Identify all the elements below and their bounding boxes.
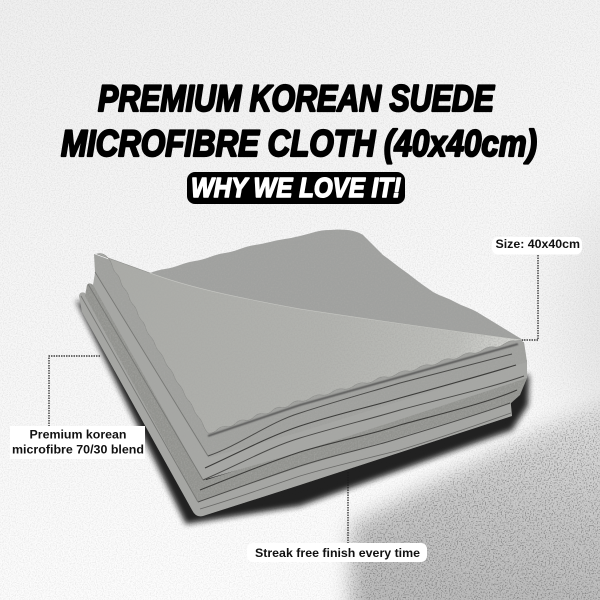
callout: streak free — [247, 472, 427, 562]
badge: why we love it: WHY WE LOVE IT! — [191, 172, 401, 203]
callout: size — [492, 237, 582, 340]
callout: microfibre blend: Premium korean — [30, 428, 126, 442]
third cloth layer — [85, 283, 527, 502]
back layer of top cloth — [150, 230, 523, 350]
callout: microfibre blend — [10, 356, 145, 459]
stack of folded microfibre cloths — [79, 230, 527, 516]
callout: size: Size: 40x40cm — [496, 239, 580, 251]
second cloth layer — [93, 271, 527, 480]
title — [61, 77, 537, 164]
cloth edge lines — [81, 272, 524, 509]
callout: microfibre blend: microfibre 70/30 blend — [12, 442, 144, 456]
cloth shadow — [76, 300, 529, 524]
title: PREMIUM KOREAN SUEDE — [98, 77, 495, 119]
callout: streak free: Streak free finish every time — [255, 546, 420, 560]
bottom cloth layer — [79, 292, 512, 516]
folded corner — [97, 254, 524, 433]
first cloth layer — [94, 254, 527, 458]
